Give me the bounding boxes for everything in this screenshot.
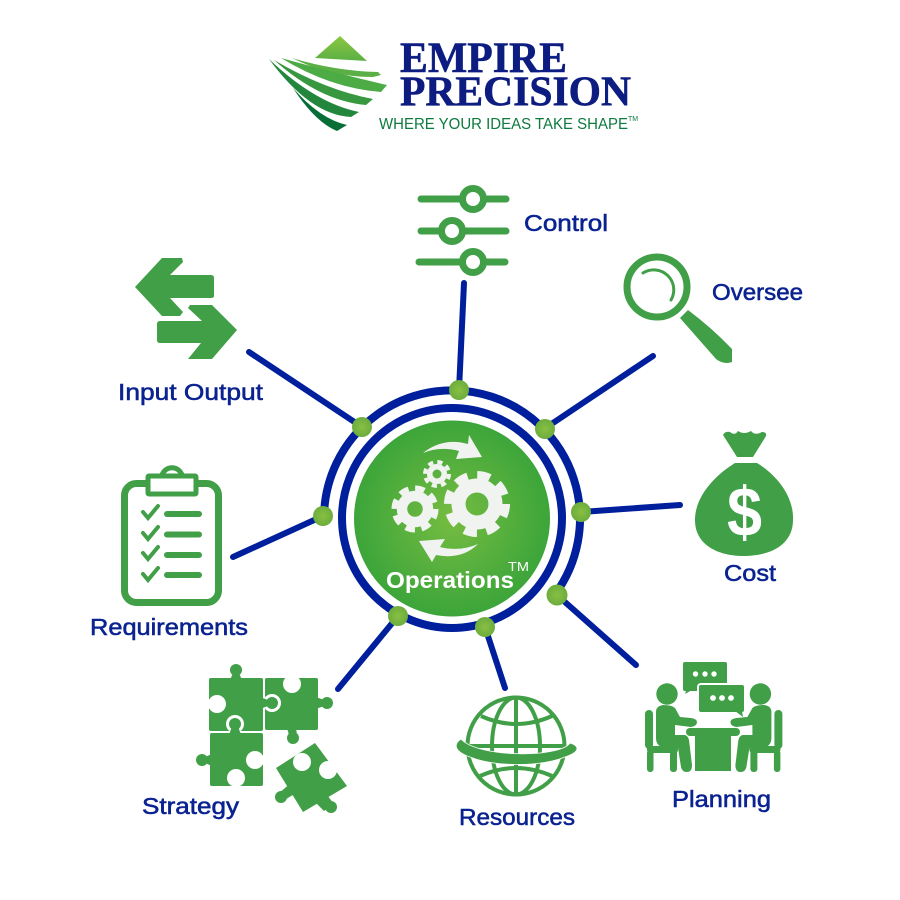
logo wordmark: EMPIRE <box>400 35 567 82</box>
logo <box>269 35 638 133</box>
inner ring <box>342 408 562 628</box>
icon: puzzle pieces <box>196 664 347 813</box>
item: control <box>419 188 608 272</box>
icon: clipboard <box>124 468 218 602</box>
label: oversee: Oversee <box>712 279 803 305</box>
icon: money bag: $ <box>727 473 762 551</box>
logo mark <box>269 36 387 131</box>
green disc <box>354 420 550 616</box>
item: resources <box>456 697 577 830</box>
logo trademark: TM <box>628 116 638 123</box>
item: cost <box>695 431 793 586</box>
label: input output: Input Output <box>118 379 264 405</box>
label: control: Control <box>524 210 608 236</box>
item: planning <box>645 662 782 812</box>
item: input output <box>118 258 264 405</box>
connector lines <box>233 283 680 689</box>
icon: gears and arrows <box>394 435 506 562</box>
label: resources: Resources <box>459 804 575 830</box>
logo wordmark second line: PRECISION <box>400 70 631 116</box>
hub trademark: TM <box>508 559 529 574</box>
item: oversee <box>627 257 803 363</box>
central hub <box>324 390 580 628</box>
item: requirements <box>90 468 248 640</box>
label: cost: Cost <box>724 560 777 586</box>
item: strategy <box>142 664 347 819</box>
icon: meeting <box>645 662 782 772</box>
icon: money bag <box>695 431 793 556</box>
icon: globe <box>456 697 577 795</box>
icon: magnifier <box>627 257 732 363</box>
label: planning: Planning <box>672 786 771 812</box>
logo tagline: WHERE YOUR IDEAS TAKE SHAPE <box>379 116 628 133</box>
hub title: Operations <box>386 567 514 593</box>
outer ring <box>324 390 580 594</box>
connector nodes <box>313 380 591 637</box>
icon: swap arrows <box>135 258 237 359</box>
label: strategy: Strategy <box>142 793 240 819</box>
label: requirements: Requirements <box>90 614 248 640</box>
icon: sliders <box>419 188 506 272</box>
